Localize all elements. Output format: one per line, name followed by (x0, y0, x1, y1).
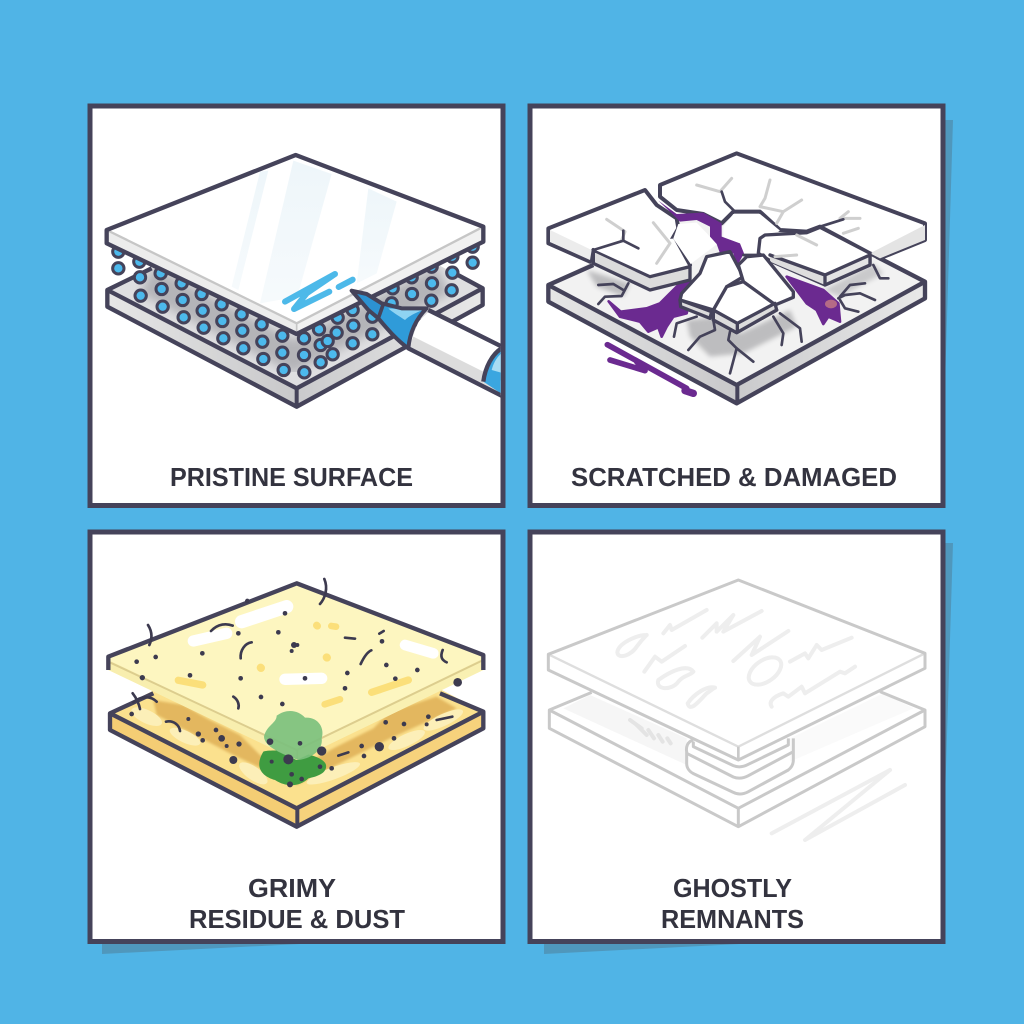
cracks on lower slab (598, 265, 888, 373)
stain highlight (825, 300, 837, 308)
panel: grimy residue and dust (90, 532, 503, 942)
spacer dots (113, 241, 478, 378)
label: pristine surface: PRISTINE SURFACE (170, 462, 413, 492)
lower slab (546, 213, 928, 406)
green mold lower (259, 750, 326, 785)
label: ghostly remnants: GHOSTLY (673, 873, 792, 903)
label: ghostly remnants: REMNANTS (661, 904, 804, 934)
label: grimy residue and dust: GRIMY (248, 873, 336, 903)
central shards (680, 227, 870, 333)
green mold upper (264, 711, 323, 760)
illustration: pristine layered surface with marker (107, 155, 503, 407)
label: grimy residue and dust: RESIDUE & DUST (189, 904, 405, 934)
panel shadows (102, 120, 953, 954)
ghost handwriting (617, 610, 905, 840)
illustration: faded layered surface (548, 580, 925, 840)
illustration: dirty layered surface (108, 579, 483, 827)
icon: blue marker pen (352, 291, 503, 397)
blue ink scribble (285, 274, 353, 309)
grey hairline cracks (607, 178, 860, 263)
label: grimy residue and dust (189, 873, 405, 934)
top slab (548, 580, 925, 760)
dust specks (129, 599, 462, 787)
top slab (108, 583, 483, 760)
lower slab (108, 690, 486, 829)
shattered top slab (548, 153, 925, 290)
purple scratch (607, 345, 693, 393)
label: ghostly remnants (661, 873, 804, 934)
central ghost pad (686, 738, 793, 794)
purple fracture (658, 201, 744, 267)
panel: scratched and damaged (530, 106, 943, 506)
lower slab (549, 692, 925, 827)
lower slab (105, 266, 485, 409)
dust hairs (133, 579, 452, 756)
purple stains (609, 277, 840, 337)
white highlights and yellow stains (178, 607, 433, 704)
label: scratched and damaged: SCRATCHED & DAMAGED (571, 462, 897, 492)
faint smudge marks (630, 720, 671, 743)
dark cracks on top slab (593, 192, 843, 255)
panel: pristine surface (90, 106, 503, 506)
panel: ghostly remnants (530, 532, 943, 942)
illustration: cracked layered surface (548, 153, 925, 403)
top glass slab (107, 155, 483, 334)
